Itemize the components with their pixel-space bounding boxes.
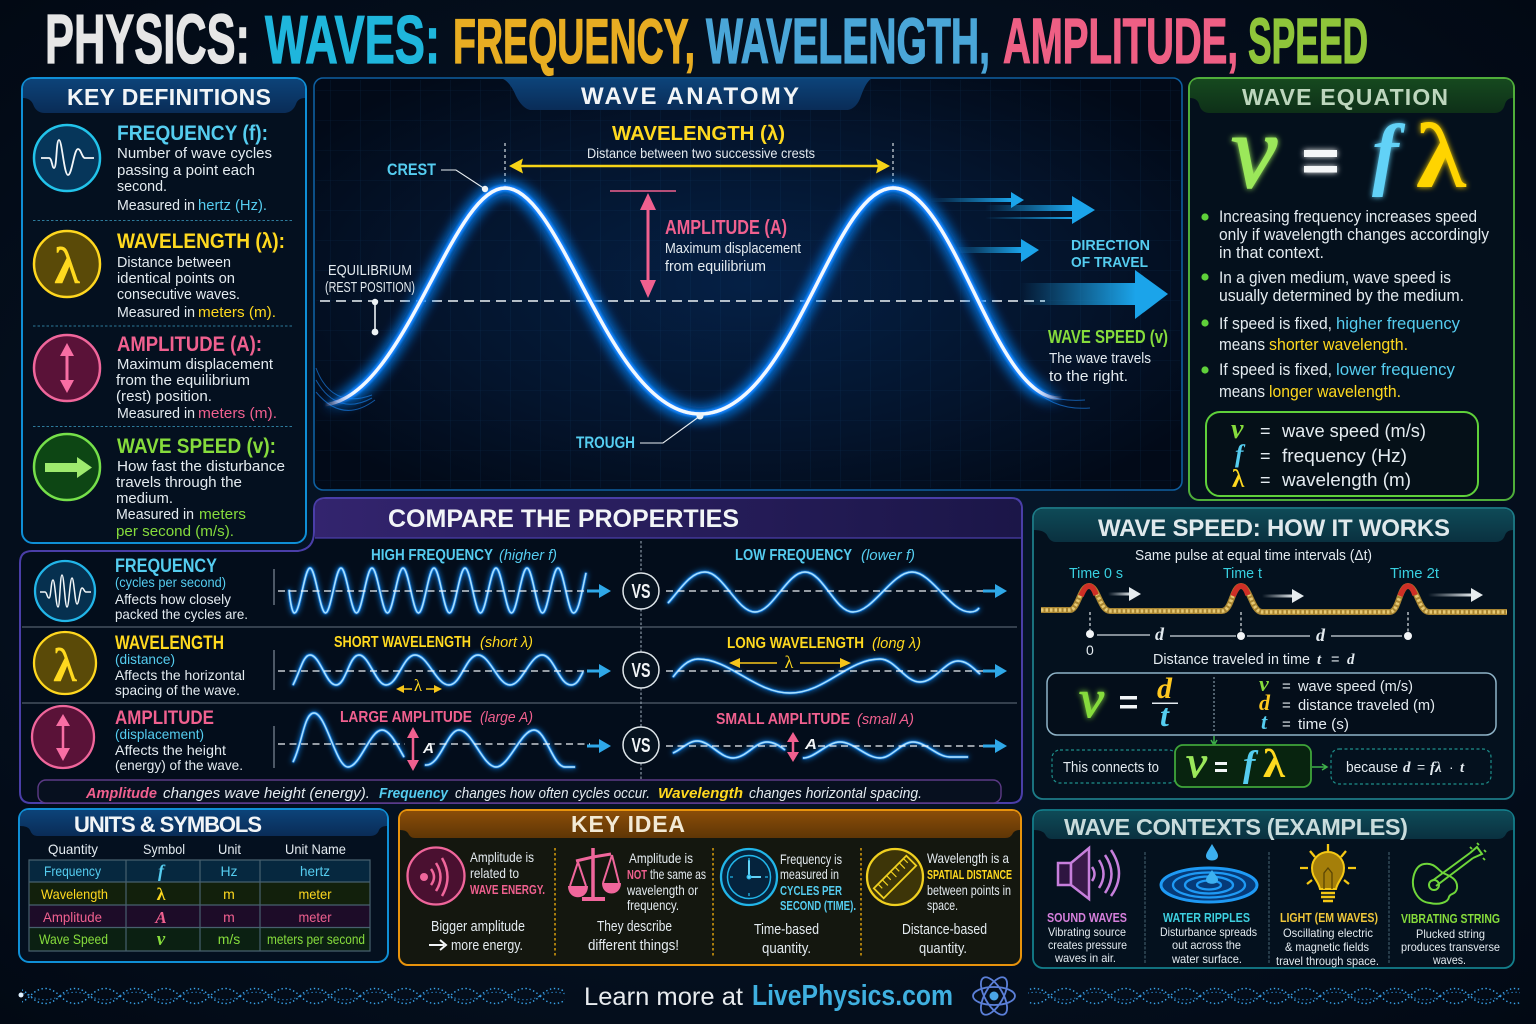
icon: atom bbox=[973, 973, 1015, 1019]
table: m bbox=[223, 886, 235, 902]
label: wave speed: WAVE SPEED (v) bbox=[1048, 327, 1168, 347]
vs badge: VS bbox=[632, 581, 650, 603]
formula box: v = f lambda: v bbox=[1186, 738, 1208, 787]
chart: low frequency bbox=[666, 547, 1007, 612]
row text: wavelength bbox=[115, 633, 245, 698]
arrow: to because bbox=[1312, 764, 1327, 770]
title: FREQUENCY, bbox=[453, 7, 695, 77]
icon: clock bbox=[721, 849, 777, 905]
label: direction of travel: DIRECTION bbox=[1071, 237, 1150, 254]
text: spatial distance: Wavelength is a bbox=[927, 850, 1009, 866]
heading: key definitions: KEY DEFINITIONS bbox=[67, 84, 271, 110]
chart: high frequency: (higher f) bbox=[499, 547, 557, 564]
row text: amplitude bbox=[115, 708, 243, 773]
text: spatial distance bbox=[902, 850, 1012, 957]
distance scale: d bbox=[1316, 625, 1326, 645]
caption: distance: d bbox=[1347, 652, 1355, 668]
chart: large amplitude: A bbox=[422, 740, 434, 757]
chart: small amplitude: A bbox=[804, 736, 817, 753]
caption: Same pulse at equal time intervals (Δt) bbox=[1135, 548, 1372, 564]
caption: distance: Distance traveled in time bbox=[1153, 652, 1310, 668]
connector: because: = bbox=[1417, 759, 1425, 775]
bullet list: means bbox=[1219, 383, 1265, 401]
chart: long wavelength bbox=[666, 635, 1007, 693]
panel: compare the properties bbox=[20, 498, 1022, 803]
panel: key definitions bbox=[22, 78, 306, 543]
label: equilibrium: EQUILIBRIUM bbox=[328, 263, 412, 279]
summary strip: changes how often cycles occur. bbox=[455, 785, 650, 802]
table: Hz bbox=[220, 863, 238, 879]
vs badge bbox=[623, 652, 659, 688]
main formula: f bbox=[1372, 110, 1406, 198]
text: energy bbox=[429, 849, 545, 954]
bullet list: In a given medium, wave speed is bbox=[1219, 269, 1451, 287]
icon: ruler bbox=[867, 849, 923, 905]
row text: amplitude: AMPLITUDE bbox=[115, 708, 214, 729]
bullet list: If speed is fixed, bbox=[1219, 361, 1332, 379]
row text: frequency: FREQUENCY bbox=[115, 556, 217, 577]
label: amplitude: AMPLITUDE (A) bbox=[665, 217, 787, 239]
definition: amplitude: Measured in bbox=[117, 405, 195, 422]
equilibrium dashed line bbox=[320, 300, 1045, 302]
table: Unit Name bbox=[285, 841, 346, 857]
text: spatial distance: between points in bbox=[927, 882, 1011, 898]
bullet list: only if wavelength changes accordingly bbox=[1219, 226, 1490, 244]
chart: long wavelength: λ bbox=[785, 652, 794, 672]
text: water ripples: Disturbance spreads bbox=[1160, 925, 1257, 939]
icon: frequency bbox=[34, 125, 100, 191]
text: energy: Bigger amplitude bbox=[431, 918, 525, 935]
formula box: v = d/t: distance traveled (m) bbox=[1298, 697, 1435, 714]
definition: wave speed: Measured in bbox=[116, 506, 194, 523]
bullet list: If speed is fixed, bbox=[1219, 315, 1332, 333]
table bbox=[29, 841, 370, 951]
summary strip: Frequency bbox=[379, 785, 449, 802]
vs badge: VS bbox=[632, 660, 650, 682]
panel: wave equation bbox=[1189, 78, 1514, 500]
text: sound waves: Vibrating source bbox=[1048, 925, 1126, 939]
text: vibrating string: produces transverse bbox=[1401, 940, 1500, 954]
heading: wave equation: WAVE EQUATION bbox=[1242, 84, 1448, 110]
bullet list bbox=[1201, 208, 1490, 401]
table: Wave Speed bbox=[39, 931, 108, 947]
table: λ bbox=[157, 884, 166, 904]
text: water ripples: out across the bbox=[1172, 938, 1241, 952]
heading: compare the properties: COMPARE THE PROPERTIES bbox=[388, 505, 739, 533]
icon: wavelength: λ bbox=[54, 238, 80, 295]
connector: because bbox=[1331, 749, 1491, 784]
connector: this connects to bbox=[1052, 750, 1177, 783]
text: vibrating string: Plucked string bbox=[1416, 927, 1485, 941]
formula box: v = d/t: v bbox=[1259, 671, 1269, 696]
definition: wavelength: meters (m). bbox=[198, 304, 276, 321]
chart: low frequency: (lower f) bbox=[861, 547, 915, 564]
table: meters per second bbox=[267, 931, 365, 947]
table: Frequency bbox=[44, 863, 101, 879]
formula box: v = f lambda: f bbox=[1243, 744, 1259, 785]
formula box: v = d/t: = bbox=[1282, 678, 1291, 695]
legend box: frequency (Hz) bbox=[1282, 446, 1407, 466]
panel: units and symbols bbox=[19, 809, 388, 962]
chart: short wavelength bbox=[278, 634, 611, 695]
chart: short wavelength: λ bbox=[414, 676, 423, 695]
text: sound waves: creates pressure bbox=[1048, 938, 1127, 952]
row text: frequency bbox=[115, 556, 248, 622]
caption: distance: t bbox=[1317, 652, 1322, 668]
definition: frequency bbox=[117, 122, 272, 214]
definition: wavelength bbox=[117, 230, 285, 321]
definition: amplitude: from the equilibrium bbox=[116, 372, 250, 389]
row text: frequency: packed the cycles are. bbox=[115, 606, 248, 622]
table: meter bbox=[298, 886, 332, 902]
legend box: = bbox=[1260, 470, 1271, 490]
label: equilibrium bbox=[325, 263, 415, 335]
main formula: λ bbox=[1416, 105, 1467, 207]
heading: wave speed how it works: WAVE SPEED: HOW IT WORKS bbox=[1098, 515, 1450, 542]
connector: because: d bbox=[1403, 760, 1411, 776]
title bbox=[45, 0, 1368, 78]
title: WAVELENGTH, bbox=[706, 5, 990, 77]
icon: wave energy bbox=[408, 848, 464, 904]
text: vibrating string bbox=[1401, 911, 1500, 967]
text: sound waves: waves in air. bbox=[1054, 951, 1116, 965]
icon: frequency bbox=[35, 561, 95, 621]
definition: frequency: hertz (Hz). bbox=[198, 197, 267, 214]
definition: frequency: FREQUENCY (f): bbox=[117, 122, 268, 145]
text: spatial distance: space. bbox=[927, 897, 958, 913]
icon: guitar bbox=[1413, 843, 1486, 904]
legend box bbox=[1206, 412, 1478, 496]
text: light: LIGHT (EM WAVES) bbox=[1280, 910, 1378, 925]
definition: amplitude bbox=[116, 333, 277, 422]
text: water ripples: WATER RIPPLES bbox=[1163, 910, 1250, 925]
arrows: direction of travel bbox=[930, 192, 1168, 319]
row text: amplitude: (displacement) bbox=[115, 726, 204, 742]
footer wave left bbox=[18, 985, 565, 1007]
formula box: v = d/t: d bbox=[1259, 690, 1271, 715]
chart: low frequency: LOW FREQUENCY bbox=[735, 547, 852, 564]
bullet list: Increasing frequency increases speed bbox=[1219, 208, 1477, 226]
formula box: v = d/t: t bbox=[1160, 697, 1170, 733]
text: not the same: wavelength or bbox=[626, 882, 698, 898]
distance scale: 0 bbox=[1086, 642, 1094, 658]
distance scale bbox=[1086, 612, 1412, 658]
table: v bbox=[157, 929, 166, 950]
icon: speaker bbox=[1058, 848, 1119, 899]
label: amplitude: from equilibrium bbox=[665, 259, 766, 275]
label: wave speed bbox=[1048, 327, 1168, 385]
definition: amplitude: Maximum displacement bbox=[117, 356, 274, 373]
row text: amplitude: Affects the height bbox=[115, 742, 226, 758]
text: frequency time: SECOND (TIME). bbox=[780, 898, 856, 913]
bullet list: lower frequency bbox=[1336, 361, 1456, 379]
label: wavelength: Distance between two successive crests bbox=[587, 145, 815, 161]
chart: short wavelength: SHORT WAVELENGTH bbox=[334, 634, 471, 651]
row text: wavelength: (distance) bbox=[115, 651, 175, 667]
main formula bbox=[1231, 93, 1467, 210]
icon: light bulb bbox=[1300, 844, 1356, 901]
text: energy: Amplitude is bbox=[470, 849, 534, 865]
bullet list: means bbox=[1219, 336, 1265, 354]
text: sound waves: SOUND WAVES bbox=[1047, 910, 1127, 925]
pulse arrows bbox=[1108, 587, 1483, 603]
title: PHYSICS: bbox=[45, 0, 250, 78]
table: m/s bbox=[218, 931, 240, 947]
text: light: Oscillating electric bbox=[1283, 926, 1373, 940]
heading: units and symbols: UNITS & SYMBOLS bbox=[74, 812, 262, 837]
chart: high frequency bbox=[278, 547, 611, 613]
title: AMPLITUDE, bbox=[1003, 5, 1238, 77]
chart: long wavelength: (long λ) bbox=[872, 635, 921, 652]
definition: wavelength: Measured in bbox=[117, 304, 195, 321]
legend box: = bbox=[1260, 446, 1271, 466]
formula box: v = d/t: wave speed (m/s) bbox=[1297, 678, 1413, 695]
distance scale: d bbox=[1155, 624, 1165, 644]
legend box: v bbox=[1231, 414, 1244, 445]
text: light bbox=[1276, 910, 1379, 968]
table: Amplitude bbox=[43, 909, 102, 925]
title: WAVES: bbox=[265, 2, 440, 78]
label: amplitude bbox=[665, 217, 801, 275]
main wave curve bbox=[320, 188, 1062, 414]
table: Unit bbox=[218, 841, 241, 857]
table: m bbox=[223, 909, 235, 925]
footer text: Learn more at bbox=[584, 983, 743, 1011]
chart: high frequency: HIGH FREQUENCY bbox=[371, 547, 493, 564]
icon: amplitude bbox=[32, 706, 94, 768]
label: crest bbox=[387, 160, 488, 192]
chart: long wavelength: LONG WAVELENGTH bbox=[727, 635, 864, 652]
rope with pulses bbox=[1041, 586, 1507, 612]
text: not the same: the same as bbox=[650, 866, 706, 882]
definition: frequency: Number of wave cycles bbox=[117, 145, 272, 162]
row text: wavelength: Affects the horizontal bbox=[115, 667, 245, 683]
chart: short wavelength: (short λ) bbox=[480, 634, 533, 651]
connector: because: fλ bbox=[1430, 760, 1442, 776]
formula box: v = d/t: t bbox=[1261, 709, 1268, 734]
table: hertz bbox=[300, 863, 330, 879]
definition: wave speed: WAVE SPEED (v): bbox=[117, 435, 276, 458]
formula box: v = d/t: d bbox=[1157, 672, 1173, 705]
text: energy: related to bbox=[470, 865, 519, 881]
definition: wave speed: How fast the disturbance bbox=[117, 458, 285, 475]
text: spatial distance: Distance-based bbox=[902, 921, 987, 938]
text: light: travel through space. bbox=[1276, 954, 1379, 968]
definition: amplitude: AMPLITUDE (A): bbox=[117, 333, 262, 356]
formula box: v = d/t: v bbox=[1079, 669, 1104, 729]
connector: this connects to: This connects to bbox=[1063, 760, 1159, 776]
text: frequency time: quantity. bbox=[762, 940, 811, 957]
definition: wavelength: WAVELENGTH (λ): bbox=[117, 230, 285, 253]
table: f bbox=[158, 861, 166, 881]
bullet list: in that context. bbox=[1219, 244, 1324, 262]
heading: wave anatomy: WAVE ANATOMY bbox=[581, 83, 799, 110]
vs badge bbox=[623, 573, 659, 609]
connector: because: because bbox=[1346, 760, 1398, 776]
text: not the same: frequency. bbox=[627, 897, 679, 913]
icon: wavelength: λ bbox=[53, 639, 77, 692]
text: water ripples bbox=[1160, 910, 1257, 966]
definition: wavelength: Distance between bbox=[117, 254, 231, 271]
formula box: v = d/t: = bbox=[1282, 697, 1291, 714]
definition: wave speed: medium. bbox=[116, 490, 173, 507]
heading: key idea: KEY IDEA bbox=[571, 811, 685, 837]
definition: wave speed: per second (m/s). bbox=[116, 523, 234, 540]
summary strip: changes horizontal spacing. bbox=[749, 785, 922, 802]
label: wave speed: The wave travels bbox=[1049, 351, 1151, 367]
icon: wavelength bbox=[34, 231, 100, 297]
summary strip: changes wave height (energy). bbox=[163, 785, 370, 802]
definition: wavelength: identical points on bbox=[117, 270, 235, 287]
legend box: λ bbox=[1232, 466, 1245, 493]
vs badge bbox=[623, 727, 659, 763]
row text: frequency: (cycles per second) bbox=[115, 574, 226, 590]
arrow: down to formula bbox=[1211, 736, 1217, 745]
chart: large amplitude: (large A) bbox=[480, 709, 533, 726]
connector: because: t bbox=[1460, 760, 1465, 776]
panel: wave contexts bbox=[1033, 810, 1514, 968]
row text: frequency: Affects how closely bbox=[115, 591, 231, 607]
text: not the same bbox=[588, 850, 706, 954]
legend box: wave speed (m/s) bbox=[1281, 421, 1426, 441]
label: wavelength bbox=[587, 123, 815, 161]
definition: wave speed: meters bbox=[199, 506, 246, 523]
bullet list: higher frequency bbox=[1336, 315, 1461, 333]
chart: small amplitude bbox=[666, 711, 1007, 762]
bullet list: longer wavelength. bbox=[1269, 383, 1401, 401]
label: equilibrium: (REST POSITION) bbox=[325, 280, 415, 296]
definition: amplitude: (rest) position. bbox=[116, 388, 212, 405]
footer text bbox=[584, 980, 953, 1012]
label: trough bbox=[576, 412, 704, 452]
chart: small amplitude: SMALL AMPLITUDE bbox=[716, 711, 850, 728]
row text: wavelength: WAVELENGTH bbox=[115, 633, 224, 654]
time labels: Time t bbox=[1223, 565, 1263, 582]
text: frequency time: CYCLES PER bbox=[780, 883, 842, 898]
chart: small amplitude: (small A) bbox=[857, 711, 914, 728]
row text: wavelength: spacing of the wave. bbox=[115, 682, 240, 698]
table: A bbox=[154, 908, 167, 927]
text: not the same: NOT bbox=[627, 867, 647, 882]
label: wavelength: WAVELENGTH (λ) bbox=[612, 123, 785, 145]
panel: key idea bbox=[399, 810, 1021, 965]
legend box: wavelength (m) bbox=[1281, 470, 1411, 490]
footer text: LivePhysics.com bbox=[752, 980, 953, 1012]
definition: wave speed: travels through the bbox=[116, 474, 242, 491]
icon: water ripples bbox=[1161, 844, 1257, 902]
text: frequency time bbox=[754, 851, 856, 957]
legend box: = bbox=[1260, 421, 1271, 441]
bullet list: shorter wavelength. bbox=[1269, 336, 1408, 354]
formula box: v = d/t bbox=[1047, 669, 1496, 735]
text: water ripples: water surface. bbox=[1171, 952, 1242, 966]
text: vibrating string: waves. bbox=[1432, 953, 1466, 967]
tail wisps bbox=[316, 368, 1090, 410]
formula box: v = f lambda: λ bbox=[1263, 741, 1285, 786]
label: amplitude: Maximum displacement bbox=[665, 241, 801, 257]
icon: wavelength bbox=[34, 632, 96, 694]
text: frequency time: measured in bbox=[780, 866, 839, 882]
text: not the same: different things! bbox=[588, 937, 679, 954]
definition: wavelength: consecutive waves. bbox=[117, 286, 240, 303]
label: direction of travel bbox=[1071, 237, 1150, 271]
heading: wave contexts: WAVE CONTEXTS (EXAMPLES) bbox=[1064, 814, 1408, 840]
chart: large amplitude bbox=[278, 709, 611, 771]
caption: distance: = bbox=[1331, 652, 1339, 668]
arrow: amplitude bbox=[610, 191, 676, 298]
text: light: & magnetic fields bbox=[1285, 940, 1369, 954]
table: Quantity bbox=[48, 841, 98, 857]
text: energy: WAVE ENERGY. bbox=[470, 882, 545, 897]
text: spatial distance: SPATIAL DISTANCE bbox=[927, 867, 1012, 882]
icon: wave speed bbox=[34, 434, 100, 500]
text: not the same: Amplitude is bbox=[629, 850, 693, 866]
label: direction of travel: OF TRAVEL bbox=[1071, 254, 1148, 271]
definition: amplitude: meters (m). bbox=[198, 405, 277, 422]
formula box: v = d/t: = bbox=[1282, 716, 1291, 733]
summary strip: Amplitude bbox=[85, 785, 157, 802]
text: vibrating string: VIBRATING STRING bbox=[1401, 911, 1500, 926]
footer wave right bbox=[1028, 985, 1520, 1007]
text: frequency time: Time-based bbox=[754, 921, 819, 938]
definition: frequency: passing a point each bbox=[117, 162, 255, 179]
table: Symbol bbox=[143, 841, 185, 857]
table: Wavelength bbox=[41, 886, 108, 902]
row text: amplitude: (energy) of the wave. bbox=[115, 757, 243, 773]
time labels: Time 2t bbox=[1390, 565, 1440, 582]
text: sound waves bbox=[1047, 910, 1127, 965]
text: not the same: They describe bbox=[597, 918, 672, 935]
summary strip bbox=[38, 780, 1001, 803]
vs badge: VS bbox=[632, 735, 650, 757]
legend box: f bbox=[1235, 441, 1246, 468]
label: trough: TROUGH bbox=[576, 433, 635, 452]
arrow: wavelength span bbox=[505, 143, 893, 188]
definition: frequency: second. bbox=[117, 178, 167, 195]
text: spatial distance: quantity. bbox=[919, 940, 967, 957]
panel: wave anatomy bbox=[314, 78, 1182, 490]
bullet list: usually determined by the medium. bbox=[1219, 287, 1464, 305]
formula box: v = d/t: time (s) bbox=[1298, 716, 1349, 733]
definition: frequency: Measured in bbox=[117, 197, 195, 214]
summary strip: Wavelength bbox=[658, 785, 743, 802]
chart: large amplitude: LARGE AMPLITUDE bbox=[340, 709, 472, 726]
connector: because: · bbox=[1449, 759, 1454, 775]
time labels: Time 0 s bbox=[1069, 565, 1123, 582]
text: frequency time: Frequency is bbox=[780, 851, 842, 867]
title: SPEED bbox=[1248, 5, 1368, 77]
icon: amplitude bbox=[34, 335, 100, 401]
time labels bbox=[1069, 565, 1440, 582]
definition: wave speed bbox=[116, 435, 285, 540]
label: crest: CREST bbox=[387, 160, 437, 179]
label: wave speed: to the right. bbox=[1049, 369, 1128, 385]
text: energy: more energy. bbox=[451, 937, 523, 954]
main formula: v bbox=[1231, 93, 1278, 210]
icon: balance scale bbox=[568, 848, 621, 899]
panel: wave speed how it works bbox=[1033, 508, 1514, 799]
formula box: v = f lambda bbox=[1175, 738, 1311, 787]
table: meter bbox=[298, 909, 332, 925]
